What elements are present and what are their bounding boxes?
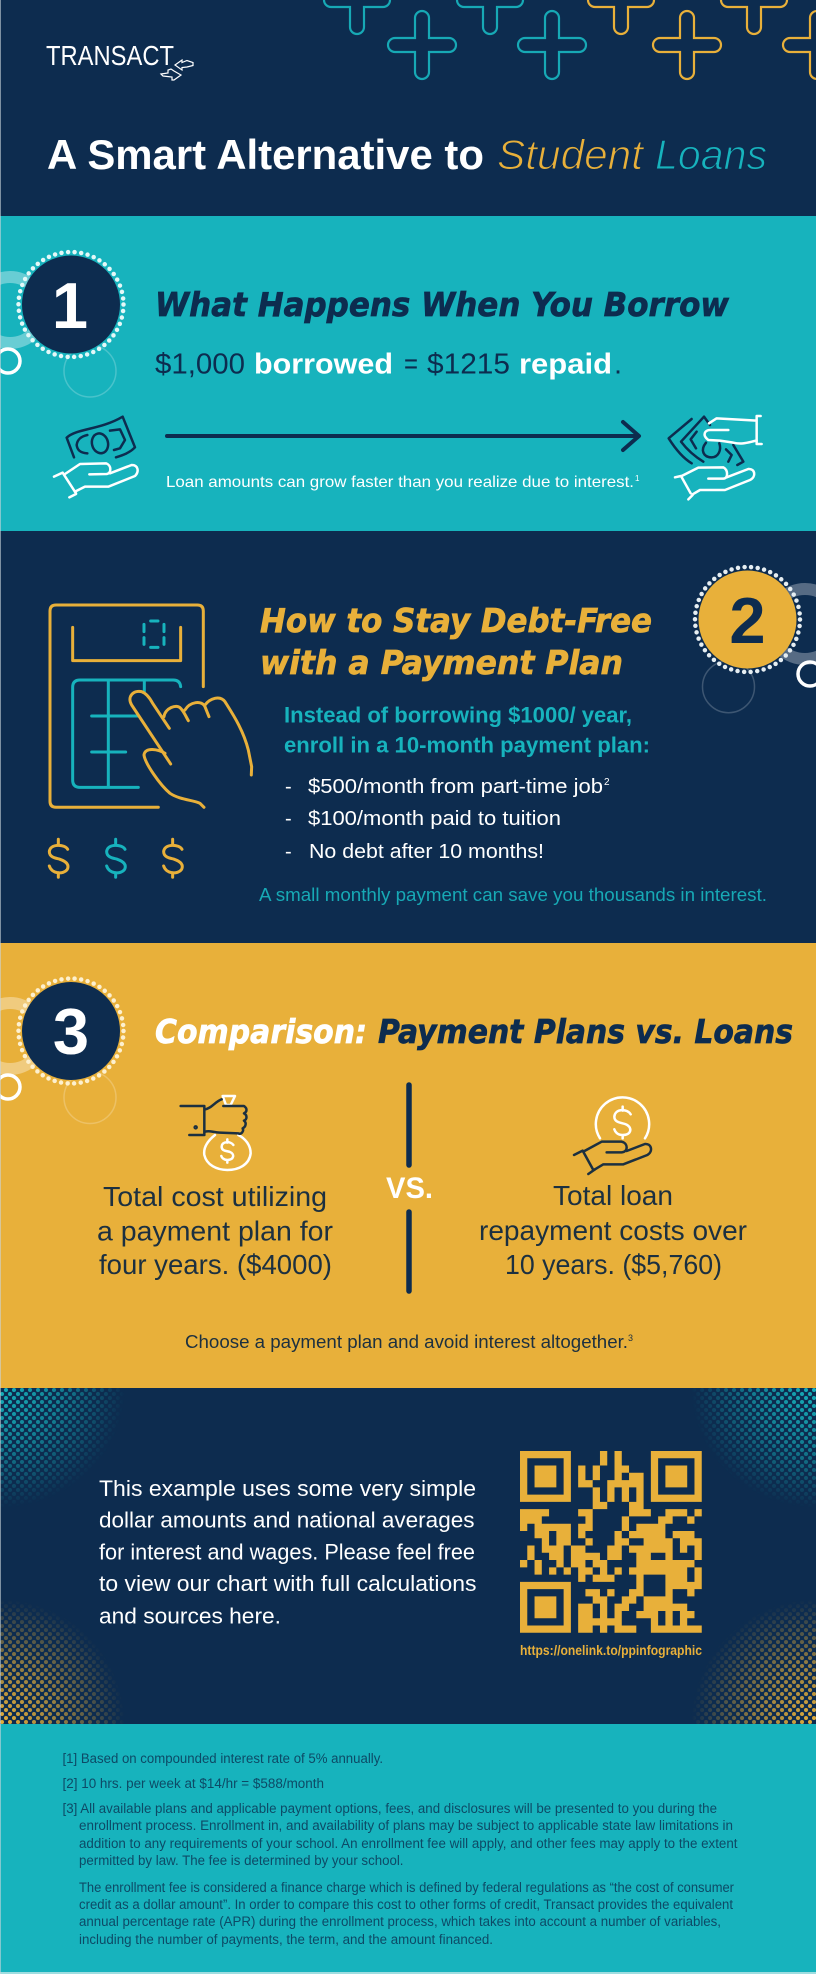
equation: = [404, 348, 418, 380]
panel: header [0, 0, 816, 216]
footnote 3: enrollment process. Enrollment in, and availability of plans may be subject to applicable state law limitations in [79, 1818, 733, 1833]
subheading: enroll in a 10-month payment plan: [284, 733, 650, 758]
heading: with a Payment Plan [260, 643, 623, 682]
footnote 2: [2] 10 hrs. per week at $14/hr = $588/month [62, 1776, 324, 1791]
text: loan total: repayment costs over [479, 1215, 747, 1246]
logo: TRANSACT [46, 40, 174, 71]
bullet list: - [285, 776, 292, 798]
badge: number 3 [0, 978, 124, 1124]
footnote 3: permitted by law. The fee is determined by your school. [79, 1853, 404, 1868]
panel: footnotes [0, 1724, 816, 1974]
footnote 3: [3] All available plans and applicable payment options, fees, and disclosures will be presented to you during the [62, 1801, 717, 1816]
bullet list: 2 [604, 777, 610, 788]
title: Student [497, 131, 645, 178]
caption: 1 [635, 474, 640, 483]
subheading [284, 703, 650, 758]
equation: . [614, 348, 622, 380]
finance charge note: annual percentage rate (APR) during the enrollment process, which takes into account a number of variables, [79, 1914, 721, 1929]
heading [155, 1012, 793, 1051]
text: loan total: 10 years. ($5,760) [505, 1249, 722, 1280]
takeaway: 3 [628, 1333, 633, 1343]
bullet list: $500/month from part-time job [308, 776, 603, 798]
QR link: https://onelink.to/ppinfographic [520, 1643, 702, 1658]
equation: borrowed [254, 348, 393, 380]
text: payment plan total: a payment plan for [97, 1216, 333, 1247]
text block: dollar amounts and national averages [99, 1507, 474, 1532]
arrow [167, 422, 639, 450]
icon: hand receiving money [54, 417, 138, 497]
finance charge note [79, 1880, 734, 1947]
bullet list: $100/month paid to tuition [308, 808, 561, 830]
title: A Smart Alternative to [47, 131, 484, 178]
icon: fist holding money bag [181, 1096, 251, 1170]
icon: hand with coin [574, 1097, 651, 1174]
heading: What Happens When You Borrow [155, 285, 729, 324]
caption: Loan amounts can grow faster than you realize due to interest. [166, 474, 634, 491]
footnote 3: addition to any requirements of your school. An enrollment fee will apply, and other fees may apply to the extent [79, 1836, 738, 1851]
panel: step 1 what happens when you borrow [0, 216, 816, 531]
equation: $1215 [427, 348, 510, 380]
panel: step 3 comparison [0, 943, 816, 1388]
equation [155, 348, 622, 380]
heading [260, 601, 652, 682]
title [47, 131, 767, 178]
bullet list: - [285, 808, 292, 830]
takeaway: A small monthly payment can save you thousands in interest. [259, 885, 767, 905]
subheading: Instead of borrowing $1000/ year, [284, 703, 632, 728]
badge: number 2: 2 [729, 584, 766, 657]
equation: repaid [519, 348, 612, 380]
bullet list [285, 776, 610, 863]
text: payment plan total [97, 1181, 333, 1280]
text block: for interest and wages. Please feel free [99, 1539, 475, 1564]
text: loan total: Total loan [553, 1180, 673, 1211]
badge: number 1: 1 [52, 269, 88, 342]
divider with vs label: VS. [386, 1172, 433, 1205]
icon: hands exchanging money [669, 416, 762, 499]
heading: Comparison: [155, 1012, 367, 1051]
left edge line [0, 0, 1, 1974]
QR code [520, 1451, 702, 1633]
icon: three dollar signs [49, 839, 182, 877]
text block: and sources here. [99, 1603, 281, 1628]
badge: number 2 [695, 567, 816, 713]
finance charge note: including the number of payments, the term, and the amount financed. [79, 1932, 493, 1947]
text block: to view our chart with full calculations [99, 1571, 476, 1596]
text: payment plan total: four years. ($4000) [99, 1249, 332, 1280]
icon: calculator and hand [49, 605, 252, 877]
panel: chart link with QR code [0, 1388, 816, 1724]
footnote 3 [62, 1801, 738, 1868]
panel: step 2 debt-free with a payment plan [0, 531, 816, 943]
equation: $1,000 [155, 348, 245, 380]
bullet list: No debt after 10 months! [309, 841, 544, 863]
title: Loans [655, 131, 767, 178]
text block: This example uses some very simple [99, 1476, 476, 1501]
finance charge note: The enrollment fee is considered a finance charge which is defined by federal regulations as “the cost of consumer [79, 1880, 734, 1895]
badge: number 3: 3 [53, 995, 89, 1068]
finance charge note: credit as a dollar amount”. In order to compare this cost to other forms of credit, Transact provides the equivalent [79, 1897, 733, 1912]
badge: number 1 [0, 252, 124, 397]
decorative plus outlines [324, 0, 816, 79]
bullet list: - [285, 841, 292, 863]
takeaway: Choose a payment plan and avoid interest altogether. [185, 1331, 628, 1352]
text block [99, 1476, 476, 1628]
heading: How to Stay Debt-Free [260, 601, 652, 640]
footnote 1: [1] Based on compounded interest rate of 5% annually. [62, 1751, 383, 1766]
text: loan total [479, 1180, 747, 1280]
text: payment plan total: Total cost utilizing [103, 1181, 327, 1212]
